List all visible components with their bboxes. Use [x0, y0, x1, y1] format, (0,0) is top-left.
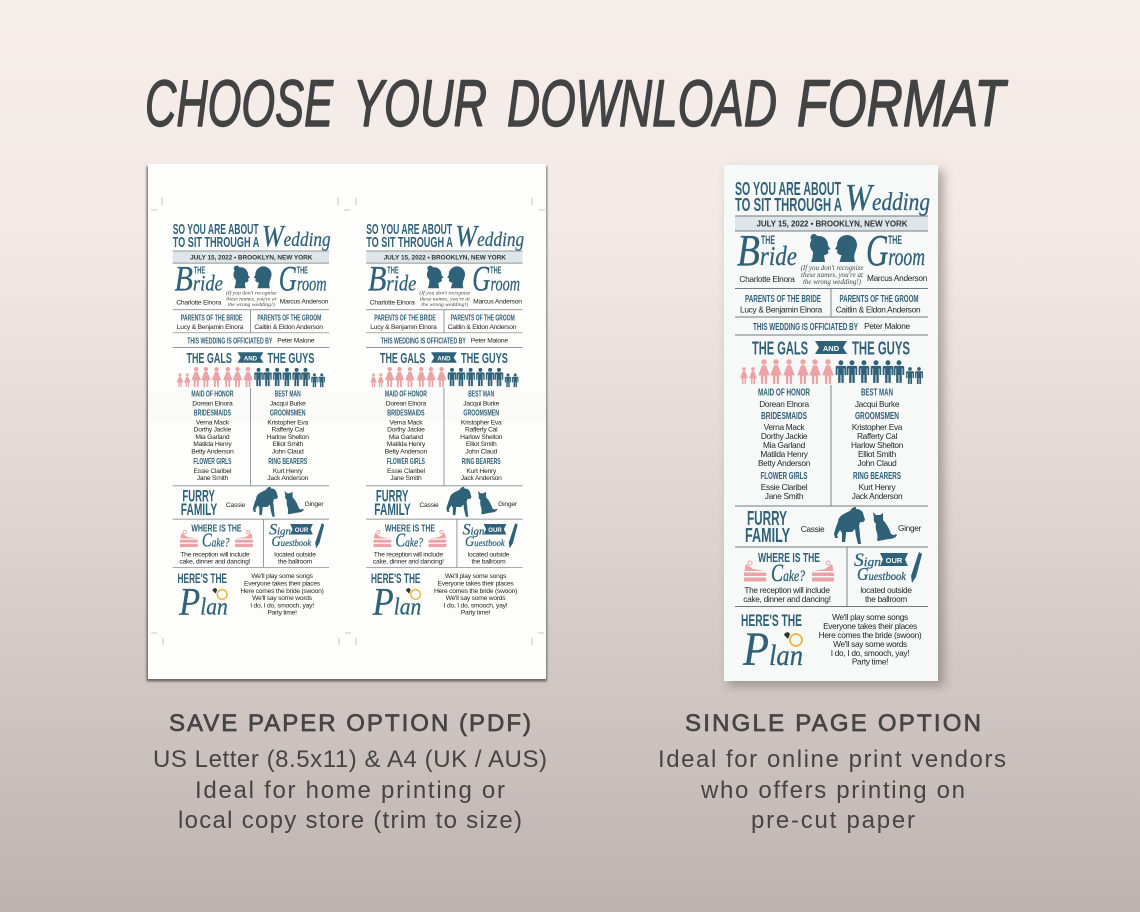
wedding party list: Kristopher Eva	[461, 419, 502, 426]
wedding party list: Mia Garland	[389, 434, 423, 441]
parents: PARENTS OF THE GROOM	[257, 314, 321, 323]
gals and guys heading: THE GUYS	[461, 351, 508, 367]
parents: PARENTS OF THE BRIDE	[181, 314, 243, 323]
people icons	[740, 359, 923, 384]
parents: Caitlin & Eldon Anderson	[254, 324, 323, 331]
here's the plan: I do, I do, smooch, yay!	[250, 602, 314, 609]
bride and groom	[368, 259, 522, 308]
sign our guestbook: Guestbook	[857, 564, 907, 584]
parents	[173, 310, 329, 333]
furry family: Ginger	[305, 501, 324, 508]
wedding party list: Dorean Elnora	[192, 401, 233, 408]
wedding party list: RING BEARERS	[853, 471, 901, 482]
furry family: Ginger	[498, 501, 518, 508]
program heading	[366, 219, 524, 253]
wedding party list: BRIDESMAIDS	[761, 411, 807, 422]
wedding party list: Kristopher Eva	[852, 422, 903, 432]
sign our guestbook: the ballroom	[865, 594, 907, 604]
where is the cake: The reception will include	[374, 551, 443, 558]
furry family	[735, 507, 928, 547]
officiant: THIS WEDDING IS OFFICIATED BY	[187, 336, 273, 345]
where is the cake: cake, dinner and dancing!	[373, 559, 444, 566]
parents: PARENTS OF THE GROOM	[451, 314, 515, 323]
bride and groom: Marcus Anderson	[473, 299, 522, 306]
program heading	[173, 219, 331, 253]
program: single page copy	[735, 177, 930, 676]
here's the plan: Everyone takes their places	[823, 621, 917, 631]
gals and guys heading: AND	[823, 344, 840, 353]
sign our guestbook	[735, 550, 928, 606]
gals and guys heading: THE GALS	[752, 338, 808, 358]
program: middle copy	[366, 219, 524, 624]
program heading: Wedding	[262, 219, 331, 253]
wedding party list: Jacqui Burke	[855, 399, 900, 409]
officiant: THIS WEDDING IS OFFICIATED BY	[381, 336, 466, 345]
parents: Lucy & Benjamin Elnora	[177, 324, 244, 331]
where is the cake: Cake?	[771, 560, 805, 587]
sign our guestbook: OUR	[886, 556, 903, 565]
here's the plan	[178, 571, 324, 624]
wedding party list: Betty Anderson	[385, 449, 427, 456]
bride and groom: Bride	[737, 226, 797, 275]
title: CHOOSE	[145, 66, 334, 140]
wedding party list: Mia Garland	[195, 434, 230, 441]
caption: single page option: Ideal for online print vendors	[658, 746, 1006, 773]
date band	[735, 216, 928, 231]
here's the plan: Plan	[742, 623, 803, 676]
wedding party list: Verna Mack	[389, 419, 423, 426]
bride and groom: THE	[297, 266, 308, 277]
gals and guys heading: THE GALS	[380, 351, 425, 367]
bride and groom: these names, you're at	[801, 271, 864, 279]
bride and groom: Charlotte Elnora	[370, 299, 415, 306]
gals and guys heading: THE GUYS	[267, 351, 315, 367]
furry family: FAMILY	[745, 525, 790, 547]
program: left copy	[173, 219, 331, 624]
here's the plan: Plan	[372, 581, 421, 624]
program heading: TO SIT THROUGH A	[366, 235, 453, 251]
here's the plan: Here comes the bride (swoon)	[240, 588, 324, 595]
bride and groom: the wrong wedding!)	[421, 301, 468, 308]
here's the plan: We'll say some words	[252, 595, 313, 602]
bride and groom: Charlotte Elnora	[739, 274, 795, 284]
gals and guys heading: THE GALS	[186, 351, 232, 367]
wedding party list: Matilda Henry	[760, 449, 809, 459]
bride and groom: Groom	[866, 226, 925, 275]
parents: Caitlin & Eldon Anderson	[448, 324, 517, 331]
panel: single page card	[724, 165, 944, 686]
wedding party list: Harlow Shelton	[851, 440, 904, 450]
date band: JULY 15, 2022 • BROOKLYN, NEW YORK	[190, 255, 313, 262]
bride and groom: (If you don't recognize	[801, 264, 863, 272]
wedding party list: FLOWER GIRLS	[193, 457, 232, 466]
where is the cake: WHERE IS THE	[385, 522, 435, 534]
sign our guestbook: the ballroom	[278, 559, 313, 566]
where is the cake: The reception will include	[180, 551, 250, 558]
officiant	[735, 321, 928, 335]
wedding party list: Kurt Henry	[273, 468, 303, 475]
where is the cake: Cake?	[202, 530, 230, 552]
sign our guestbook	[366, 522, 523, 567]
wedding party list: John Claud	[272, 449, 304, 456]
wedding party list: Kurt Henry	[859, 482, 896, 492]
wedding party list: Kristopher Eva	[267, 419, 309, 426]
bride and groom: THE	[761, 233, 775, 247]
furry family: FAMILY	[374, 501, 411, 519]
parents: PARENTS OF THE BRIDE	[745, 294, 821, 305]
wedding party list: Jane Smith	[197, 475, 228, 482]
where is the cake: The reception will include	[744, 585, 830, 595]
sign our guestbook: Sign	[463, 522, 484, 539]
where is the cake: WHERE IS THE	[191, 522, 242, 534]
program heading: SO YOU ARE ABOUT	[735, 179, 841, 199]
here's the plan: Plan	[178, 581, 228, 624]
caption: save paper option	[153, 710, 547, 834]
sign our guestbook: Guestbook	[272, 534, 312, 550]
wedding party list: Dorthy Jackie	[761, 431, 808, 441]
wedding party list: Matilda Henry	[387, 441, 426, 448]
here's the plan: Party time!	[267, 609, 297, 616]
wedding party list: Jack Anderson	[267, 475, 309, 482]
people icons	[177, 367, 325, 387]
wedding party list: Jack Anderson	[852, 491, 903, 501]
wedding party list: Matilda Henry	[193, 441, 232, 448]
bride and groom: (If you don't recognize	[226, 290, 277, 297]
wedding party list: Elliot Smith	[272, 441, 304, 448]
here's the plan: Here comes the bride (swoon)	[819, 630, 922, 640]
wedding party list: Mia Garland	[763, 440, 806, 450]
here's the plan: Party time!	[852, 656, 888, 666]
where is the cake: cake, dinner and dancing!	[743, 594, 831, 604]
panel: save paper sheet	[146, 164, 547, 682]
wedding party list	[735, 385, 928, 506]
wedding party list: Betty Anderson	[191, 449, 234, 456]
furry family: Cassie	[419, 502, 439, 509]
sign our guestbook: the ballroom	[471, 559, 506, 566]
wedding party list	[366, 388, 523, 486]
here's the plan: Here comes the bride (swoon)	[434, 588, 517, 595]
wedding party list: Jacqui Burke	[463, 401, 500, 408]
bride and groom: Groom	[279, 259, 327, 299]
bride and groom: Bride	[368, 259, 417, 299]
title	[145, 66, 1009, 140]
wedding party list: BRIDESMAIDS	[387, 408, 425, 417]
caption: save paper option: Ideal for home printing or	[195, 777, 505, 804]
caption: single page option: pre-cut paper	[751, 807, 915, 834]
gals and guys heading	[186, 351, 315, 367]
wedding party list: MAID OF HONOR	[191, 389, 234, 398]
wedding party list: John Claud	[465, 449, 498, 456]
furry family: Cassie	[801, 524, 825, 534]
wedding party list: Dorthy Jackie	[194, 427, 232, 434]
program heading: TO SIT THROUGH A	[735, 195, 842, 215]
here's the plan: We'll play some songs	[445, 573, 507, 580]
parents: Lucy & Benjamin Elnora	[740, 304, 823, 314]
wedding party list: BEST MAN	[468, 389, 494, 398]
wedding party list: FLOWER GIRLS	[387, 457, 425, 466]
caption: single page option	[658, 710, 1006, 834]
bride and groom: Charlotte Elnora	[176, 299, 221, 306]
wedding party list: Rafferty Cal	[465, 427, 498, 434]
here's the plan: We'll say some words	[446, 595, 506, 602]
here's the plan: We'll play some songs	[832, 612, 908, 622]
gals and guys heading: AND	[437, 356, 451, 362]
wedding party list: Elliot Smith	[858, 449, 897, 459]
officiant: Peter Malone	[471, 338, 508, 345]
wedding party list: Jane Smith	[390, 475, 422, 482]
sign our guestbook: located outside	[860, 585, 912, 595]
sign our guestbook	[173, 522, 329, 567]
wedding party list: RING BEARERS	[268, 457, 308, 466]
wedding party list	[173, 388, 329, 486]
caption: single page option: SINGLE PAGE OPTION	[685, 710, 981, 737]
here's the plan	[371, 571, 517, 624]
wedding party list: Betty Anderson	[758, 458, 811, 468]
officiant	[366, 336, 523, 347]
date band: JULY 15, 2022 • BROOKLYN, NEW YORK	[384, 255, 506, 262]
here's the plan: Everyone takes their places	[244, 581, 321, 588]
program heading: SO YOU ARE ABOUT	[173, 222, 259, 238]
furry family	[366, 487, 523, 519]
parents: PARENTS OF THE BRIDE	[374, 314, 436, 323]
people icons	[370, 367, 518, 387]
parents: Caitlin & Eldon Anderson	[836, 304, 921, 314]
wedding party list: Dorean Elnora	[386, 401, 426, 408]
sign our guestbook: OUR	[295, 528, 309, 534]
wedding party list: Rafferty Cal	[857, 431, 897, 441]
caption: single page option: who offers printing on	[700, 777, 965, 804]
caption: save paper option: SAVE PAPER OPTION (PDF)	[169, 710, 531, 737]
bride and groom: these names, you're at	[226, 296, 277, 302]
wedding party list: GROOMSMEN	[463, 408, 499, 417]
here's the plan: HERE'S THE	[371, 571, 420, 586]
gals and guys heading: THE GUYS	[852, 338, 910, 358]
sign our guestbook: OUR	[488, 528, 502, 534]
date band	[173, 251, 329, 263]
wedding party list: Harlow Shelton	[460, 434, 503, 441]
here's the plan	[741, 611, 922, 676]
program heading: Wedding	[455, 219, 524, 253]
furry family	[173, 487, 329, 519]
title: YOUR	[353, 66, 487, 140]
here's the plan: We'll play some songs	[251, 573, 314, 580]
bride and groom: Groom	[472, 259, 520, 299]
bride and groom: Bride	[174, 259, 223, 299]
wedding party list: MAID OF HONOR	[385, 389, 427, 398]
title: DOWNLOAD	[507, 66, 777, 140]
program heading: SO YOU ARE ABOUT	[366, 222, 452, 238]
parents: PARENTS OF THE GROOM	[840, 294, 918, 305]
wedding party list: John Claud	[858, 458, 897, 468]
bride and groom: the wrong wedding!)	[803, 278, 862, 286]
sign our guestbook: Sign	[269, 522, 291, 539]
furry family: Ginger	[898, 523, 922, 533]
gals and guys heading	[380, 351, 508, 367]
program heading	[735, 177, 930, 219]
bride and groom	[174, 259, 329, 308]
wedding party list: Rafferty Cal	[272, 427, 305, 434]
wedding party list: Kurt Henry	[466, 468, 497, 475]
where is the cake	[179, 519, 263, 567]
bride and groom: Marcus Anderson	[280, 299, 329, 306]
wedding party list: BEST MAN	[275, 389, 301, 398]
bride and groom: THE	[387, 266, 399, 277]
bride and groom: THE	[490, 266, 502, 277]
wedding party list: RING BEARERS	[462, 457, 501, 466]
here's the plan: HERE'S THE	[741, 611, 802, 630]
furry family: FURRY	[376, 487, 408, 505]
wedding party list: FLOWER GIRLS	[760, 471, 808, 482]
wedding party list: Dorthy Jackie	[387, 427, 425, 434]
here's the plan: Everyone takes their places	[438, 581, 514, 588]
title: FORMAT	[797, 66, 1009, 140]
wedding party list: Jack Anderson	[461, 475, 502, 482]
parents	[735, 288, 928, 317]
program heading: Wedding	[845, 177, 930, 219]
officiant: Peter Malone	[277, 338, 315, 345]
wedding party list: GROOMSMEN	[270, 408, 306, 417]
bride and groom: Marcus Anderson	[867, 273, 928, 283]
wedding party list: MAID OF HONOR	[758, 388, 810, 398]
sign our guestbook: Sign	[854, 550, 881, 571]
furry family: Cassie	[226, 502, 246, 509]
where is the cake: Cake?	[395, 530, 423, 552]
sign our guestbook: Guestbook	[465, 534, 505, 550]
here's the plan: HERE'S THE	[178, 571, 227, 586]
bride and groom: (If you don't recognize	[419, 290, 471, 297]
wedding party list: Dorean Elnora	[759, 399, 809, 409]
gals and guys heading: AND	[244, 356, 258, 362]
where is the cake	[373, 519, 457, 567]
wedding party list: GROOMSMEN	[855, 411, 899, 422]
bride and groom	[737, 226, 928, 286]
furry family: FURRY	[182, 487, 215, 505]
wedding party list: Jacqui Burke	[270, 401, 306, 408]
caption: save paper option: local copy store (trim to size)	[178, 807, 522, 834]
officiant: Peter Malone	[864, 321, 911, 331]
wedding party list: Essie Claribel	[194, 468, 232, 475]
wedding party list: Jane Smith	[765, 491, 804, 501]
date band	[366, 251, 523, 263]
wedding party list: Verna Mack	[764, 422, 806, 432]
here's the plan: I do, I do, smooch, yay!	[444, 602, 508, 609]
wedding party list: Harlow Shelton	[267, 434, 309, 441]
date band: JULY 15, 2022 • BROOKLYN, NEW YORK	[756, 220, 908, 228]
gals and guys heading	[752, 338, 910, 358]
officiant	[173, 336, 329, 347]
officiant: THIS WEDDING IS OFFICIATED BY	[753, 322, 858, 333]
wedding party list: Essie Claribel	[387, 468, 425, 475]
wedding party list: Elliot Smith	[466, 441, 497, 448]
where is the cake: cake, dinner and dancing!	[179, 559, 251, 566]
wedding party list: BEST MAN	[861, 388, 893, 398]
wedding party list: BRIDESMAIDS	[194, 408, 231, 417]
wedding party list: Verna Mack	[196, 419, 230, 426]
bride and groom: THE	[888, 233, 902, 247]
parents	[366, 310, 523, 333]
bride and groom: the wrong wedding!)	[228, 301, 275, 308]
sign our guestbook: located outside	[468, 551, 510, 558]
where is the cake: WHERE IS THE	[758, 550, 820, 565]
wedding party list: Essie Claribel	[761, 482, 808, 492]
parents: Lucy & Benjamin Elnora	[370, 324, 437, 331]
caption: save paper option: US Letter (8.5x11) & A4 (UK / AUS)	[153, 746, 547, 773]
program heading: TO SIT THROUGH A	[173, 235, 260, 251]
furry family: FURRY	[747, 508, 787, 530]
bride and groom: THE	[194, 266, 205, 277]
furry family: FAMILY	[181, 501, 217, 519]
where is the cake	[743, 547, 847, 606]
here's the plan: Party time!	[461, 609, 491, 616]
here's the plan: I do, I do, smooch, yay!	[831, 648, 909, 658]
bride and groom: these names, you're at	[420, 296, 470, 302]
here's the plan: We'll say some words	[833, 639, 907, 649]
sign our guestbook: located outside	[274, 551, 316, 558]
